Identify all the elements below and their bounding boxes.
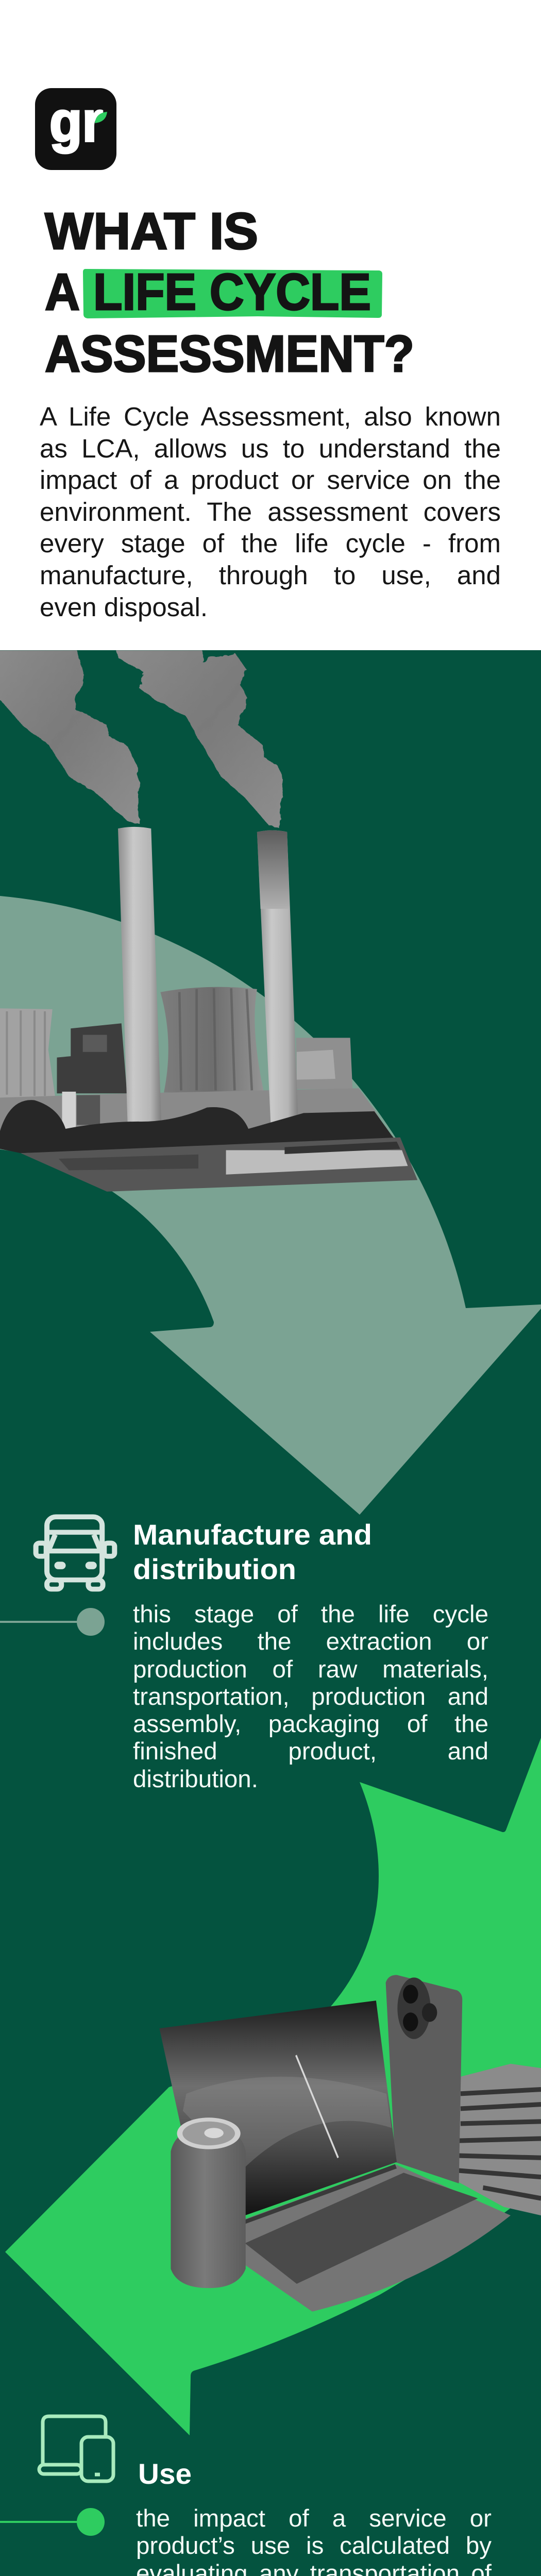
marker: use timeline dot: [0, 2508, 105, 2536]
text: manufacture and distribution description: distribution.: [133, 1766, 258, 1793]
icon: truck: [36, 1517, 114, 1589]
title: LIFE CYCLE: [93, 263, 371, 321]
text: manufacture and distribution description: finished product, and: [133, 1738, 488, 1765]
text: use description: product’s use is calculated by: [136, 2532, 492, 2560]
heading: use: Use: [138, 2458, 192, 2490]
title: A: [45, 263, 80, 321]
text: manufacture and distribution description: includes the extraction or: [133, 1628, 488, 1655]
heading: manufacture and distribution: Manufacture and: [133, 1518, 372, 1551]
text: use description: the impact of a service or: [136, 2505, 492, 2532]
arrow: use stage bright green: [5, 1738, 541, 2435]
text: intro paragraph: impact of a product or service on the: [40, 465, 501, 495]
text: intro paragraph: environment. The assessment covers: [40, 497, 501, 527]
image: power plant with smoke: [0, 640, 417, 1192]
can: [171, 2117, 246, 2288]
text: manufacture and distribution description: transportation, production and: [133, 1683, 488, 1710]
title: ASSESSMENT?: [45, 325, 414, 383]
icon: gr logo badge: [35, 88, 116, 170]
image: laptop, phone, can and newspapers: [159, 1975, 541, 2312]
text: intro paragraph: manufacture, through to use, and: [40, 561, 501, 590]
text: intro paragraph: even disposal.: [40, 592, 208, 622]
text: intro paragraph: [40, 402, 501, 622]
phone: [386, 1975, 462, 2183]
text: intro paragraph: as LCA, allows us to understand the: [40, 434, 501, 463]
text: intro paragraph: A Life Cycle Assessment, also known: [40, 402, 501, 431]
text: use description: [136, 2505, 492, 2576]
text: intro paragraph: every stage of the life cycle - from: [40, 529, 501, 558]
title: [45, 202, 414, 383]
text: manufacture and distribution description: [133, 1601, 488, 1793]
text: manufacture and distribution description: assembly, packaging of the: [133, 1710, 488, 1738]
heading: manufacture and distribution: [133, 1518, 372, 1585]
laptop: [159, 2001, 511, 2312]
panel: white header background: [0, 0, 541, 650]
icon: gr logo badge: gr: [49, 90, 103, 154]
text: manufacture and distribution description: this stage of the life cycle: [133, 1601, 488, 1628]
marker: manufacture timeline dot: [0, 1608, 105, 1636]
icon: laptop and phone devices: [39, 2416, 113, 2481]
title: WHAT IS: [45, 202, 258, 260]
arrow: manufacture stage pale green: [0, 896, 541, 1515]
heading: manufacture and distribution: distribution: [133, 1553, 296, 1585]
panel: dark green body background: [0, 650, 541, 2576]
text: manufacture and distribution description: production of raw materials,: [133, 1656, 488, 1683]
newspapers: [457, 2064, 541, 2215]
